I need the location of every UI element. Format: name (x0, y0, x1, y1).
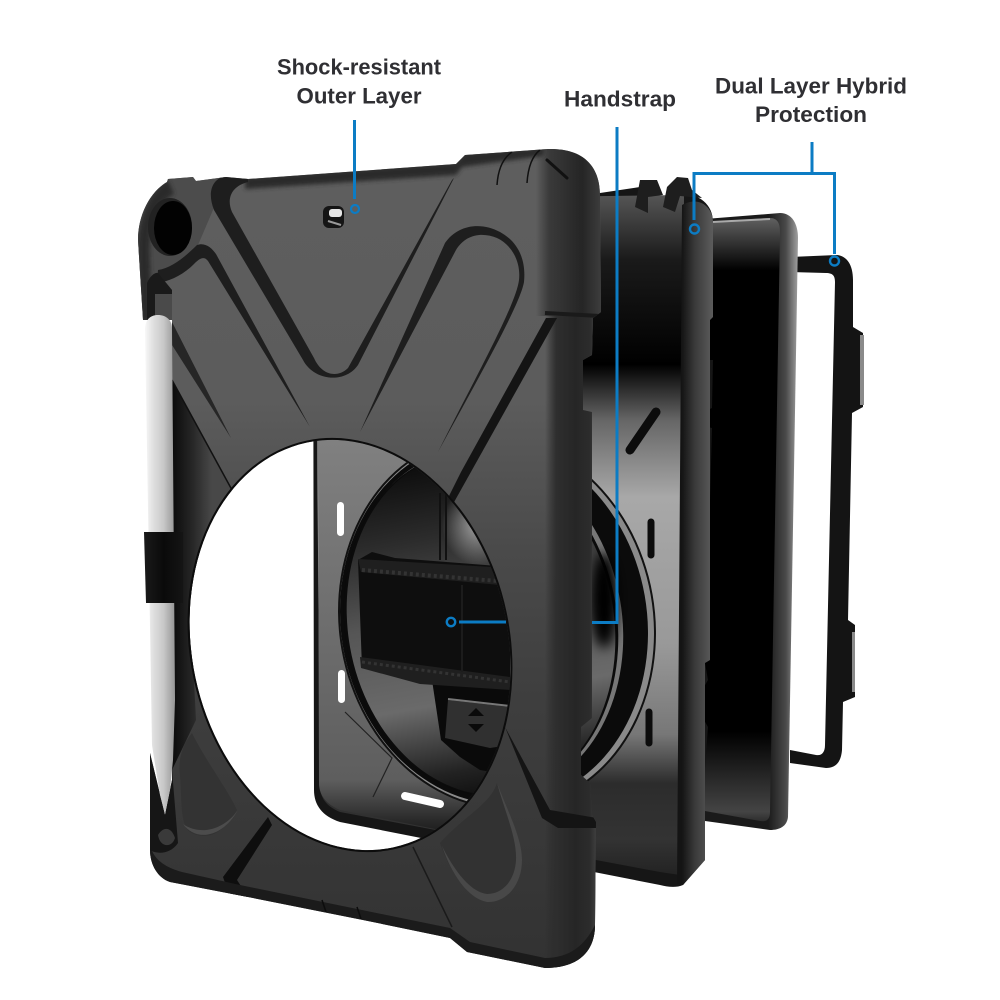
front layer: shock-resistant outer shell (138, 145, 605, 970)
lower left lobe (180, 734, 211, 768)
textured back plate (315, 195, 684, 875)
rear camera opening (323, 206, 344, 228)
middle shell body (313, 187, 713, 887)
infographic canvas (138, 58, 906, 968)
callout: handstrap (447, 86, 676, 626)
lower left band (223, 817, 272, 897)
handstrap band (358, 552, 510, 690)
callout: dual layer hybrid protection (690, 74, 907, 266)
marker (351, 205, 359, 213)
plate slots (337, 412, 656, 804)
right lobe ridge (360, 226, 524, 452)
middle layer: handstrap shell (309, 177, 713, 887)
right marker (830, 256, 839, 266)
hole rim (188, 438, 512, 852)
label: outer layer: Outer Layer (296, 84, 422, 108)
outer rim of middle shell (677, 201, 713, 885)
pencil well (150, 753, 178, 853)
pencil holder strap (144, 532, 183, 603)
marker (447, 618, 455, 626)
buckle under handstrap (432, 680, 510, 775)
label: protection: Protection (755, 102, 867, 127)
left wedge (172, 380, 232, 770)
label: dual layer hybrid: Dual Layer Hybrid (715, 74, 907, 98)
back layer: screen panel (705, 213, 798, 830)
top edge strip (245, 147, 545, 189)
left marker (690, 224, 699, 234)
bottom edge strip (150, 846, 595, 970)
label: handstrap: Handstrap (564, 86, 676, 112)
pencil slot notch (147, 273, 172, 322)
back layer: hybrid inner frame (790, 255, 864, 768)
top right corner (539, 149, 601, 316)
V ridge (211, 176, 454, 378)
left ridge (157, 244, 310, 427)
label: shock-resistant: Shock-resistant (277, 54, 442, 80)
leader line (459, 127, 617, 622)
plate left portion (318, 440, 480, 838)
callout: shock-resistant outer layer (277, 54, 442, 213)
bracket line (694, 142, 834, 254)
stylus pencil (144, 315, 183, 814)
shell moulded details (138, 145, 605, 970)
frame clips (852, 335, 864, 692)
shell body (138, 149, 601, 968)
corner marks (497, 150, 540, 185)
top left corner area (138, 176, 226, 320)
lower right band (505, 727, 597, 828)
leader line (353, 120, 356, 199)
strap hooks (635, 177, 702, 213)
right side band (547, 316, 596, 968)
lower right lobe (486, 784, 497, 801)
camera cutout (148, 198, 192, 256)
disc shadow at right (590, 552, 618, 648)
rotating ring and disc (338, 462, 656, 803)
diagonal band (447, 318, 557, 504)
